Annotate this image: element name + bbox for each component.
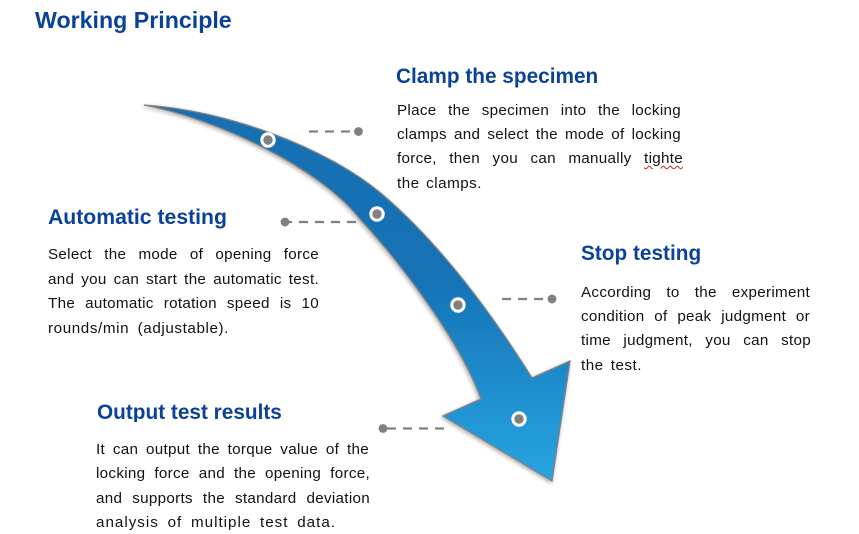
text: stop testing: the test. (581, 357, 642, 374)
text: automatic testing (48, 246, 319, 337)
marker 3 (452, 299, 464, 311)
text: stop testing: condition of peak judgment or (581, 308, 810, 325)
text: stop testing: time judgment, you can stop (581, 332, 811, 349)
title: Working Principle (35, 7, 232, 33)
connector: automatic (281, 218, 356, 226)
text: clamp the specimen: force, then you can manually tighte (397, 150, 683, 167)
text: automatic testing: Select the mode of opening force (48, 246, 319, 263)
text: stop testing: According to the experiment (581, 284, 810, 301)
text: output test results: analysis of multiple test data. (96, 514, 336, 531)
heading: stop testing: Stop testing (581, 242, 701, 265)
marker 1 (262, 134, 274, 146)
text: automatic testing: The automatic rotation speed is 10 (48, 295, 319, 312)
text: automatic testing: rounds/min (adjustable). (48, 320, 229, 337)
text: clamp the specimen: Place the specimen into the locking (397, 102, 681, 119)
text: stop testing (581, 284, 811, 374)
text: output test results (96, 441, 370, 531)
curved arrow (144, 105, 570, 481)
text: clamp the specimen: clamps and select the mode of locking (397, 126, 681, 143)
connector: clamp (309, 127, 363, 136)
text: output test results: It can output the torque value of the (96, 441, 369, 458)
connector: stop (502, 295, 556, 303)
text: clamp the specimen (397, 102, 683, 192)
marker 4 (513, 413, 525, 425)
marker 2 (371, 208, 383, 220)
heading: clamp the specimen: Clamp the specimen (396, 65, 598, 88)
text: output test results: locking force and the opening force, (96, 465, 370, 482)
text: output test results: and supports the standard deviation (96, 490, 370, 507)
connector: output (379, 424, 444, 433)
heading: automatic testing: Automatic testing (48, 206, 227, 229)
text: automatic testing: and you can start the automatic test. (48, 271, 319, 288)
text: clamp the specimen: the clamps. (397, 175, 482, 192)
